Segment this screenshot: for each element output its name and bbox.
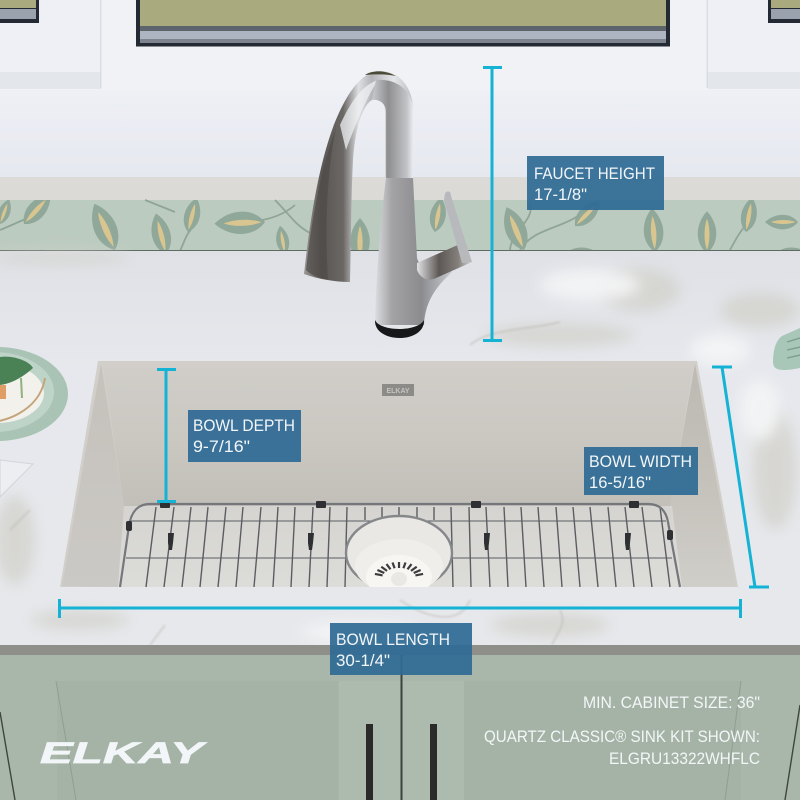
label: faucet height: FAUCET HEIGHT: [534, 164, 655, 183]
label: faucet height: 17-1/8": [534, 185, 587, 204]
drain basket: [344, 514, 454, 587]
counter front edge: [0, 645, 800, 656]
spatula: [773, 328, 800, 370]
right small window: [768, 0, 800, 23]
sink grid: [120, 504, 680, 587]
spout head: [372, 80, 413, 178]
cabinet size note: MIN. CABINET SIZE: 36": [583, 694, 760, 712]
label: bowl depth: 9-7/16": [193, 437, 250, 456]
sink kit note: ELGRU13322WHFLC: [609, 750, 760, 768]
spout shadow: [306, 128, 336, 279]
dimension: bowl length: [59, 599, 741, 675]
base ring: [375, 320, 424, 338]
sink kit note: [484, 728, 760, 768]
spout highlight: [340, 80, 378, 150]
plate with toast: [0, 347, 68, 441]
right wall: [670, 364, 736, 587]
label: bowl length: [330, 623, 472, 675]
window frame side blocks: [0, 0, 800, 89]
marble countertop: [0, 251, 800, 646]
window wall: [0, 0, 800, 90]
leaf tile backsplash: [0, 199, 800, 251]
main window: [136, 0, 670, 46]
label: faucet height: [527, 156, 664, 210]
sink: [60, 361, 738, 587]
logo plate: ELKAY: [386, 388, 410, 395]
cabinet doors: [0, 655, 800, 800]
dimension: faucet height: [483, 68, 664, 341]
faucet: [304, 71, 472, 338]
Elkay logo: ELKAY: [40, 737, 207, 770]
label: bowl length: 30-1/4": [336, 651, 390, 670]
napkin: [0, 460, 33, 497]
cabinet handles: [366, 724, 437, 800]
back wall: [103, 368, 693, 506]
dimension: bowl width: [584, 367, 769, 587]
label: bowl width: [584, 447, 698, 495]
left wall: [62, 364, 124, 587]
sink floor: [118, 506, 682, 587]
window sill: [0, 90, 800, 200]
dimension: bowl depth: [157, 369, 301, 502]
mixer body: [375, 178, 452, 325]
label: bowl width: 16-5/16": [589, 473, 651, 492]
spout tip shadow: [365, 71, 396, 76]
grid clips: [126, 501, 673, 550]
label: bowl depth: [188, 410, 301, 462]
left small window: [0, 0, 39, 23]
arched spout: [304, 71, 413, 282]
label: bowl depth: BOWL DEPTH: [193, 416, 295, 435]
sink kit note: QUARTZ CLASSIC® SINK KIT SHOWN:: [484, 728, 760, 746]
logo plate: [382, 384, 414, 396]
handle hub: [417, 244, 472, 280]
label: bowl width: BOWL WIDTH: [589, 452, 692, 471]
handle lever: [444, 191, 472, 263]
label: bowl length: BOWL LENGTH: [336, 630, 450, 649]
